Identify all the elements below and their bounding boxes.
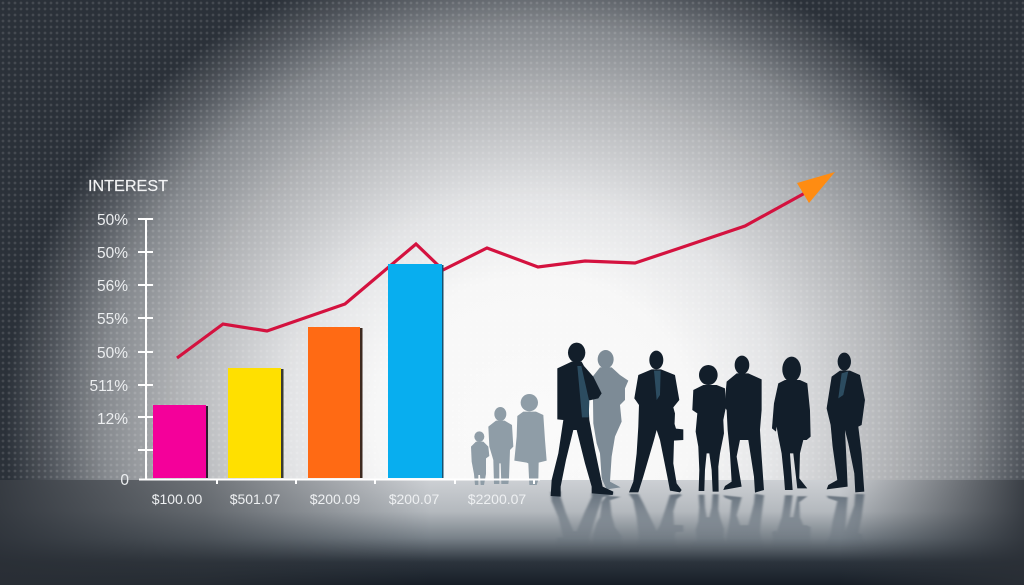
people silhouettes <box>551 343 865 497</box>
silhouette reflections <box>550 491 866 536</box>
y axis labels: 12% <box>97 411 128 428</box>
bar: yellow <box>228 368 284 478</box>
bar chart <box>153 264 444 478</box>
y axis labels: 56% <box>97 278 128 295</box>
neckties <box>577 366 848 417</box>
y axis labels: 0 <box>120 472 129 489</box>
red trend line <box>177 193 805 358</box>
x axis labels: $501.07 <box>230 491 281 507</box>
bar: blue <box>388 264 444 478</box>
x axis labels: $200.09 <box>310 491 361 507</box>
foreground adult silhouettes <box>551 343 865 497</box>
y axis labels: 50% <box>97 345 128 362</box>
x axis labels: $2200.07 <box>468 491 526 507</box>
x axis labels: $200.07 <box>389 491 440 507</box>
chart title: INTEREST <box>88 178 168 195</box>
bar: magenta <box>153 405 208 478</box>
y axis labels <box>90 212 129 489</box>
background adult silhouette <box>593 350 628 489</box>
y axis <box>138 218 153 479</box>
x axis <box>139 479 540 484</box>
x axis labels <box>152 491 526 507</box>
children silhouettes <box>471 394 547 485</box>
bar: orange <box>308 327 362 478</box>
y axis labels: 50% <box>97 212 128 229</box>
floor <box>0 480 1024 585</box>
arrowhead <box>797 172 835 203</box>
y axis labels: 50% <box>97 245 128 262</box>
y axis labels: 55% <box>97 311 128 328</box>
x axis labels: $100.00 <box>152 491 203 507</box>
y axis labels: 511% <box>90 378 128 395</box>
